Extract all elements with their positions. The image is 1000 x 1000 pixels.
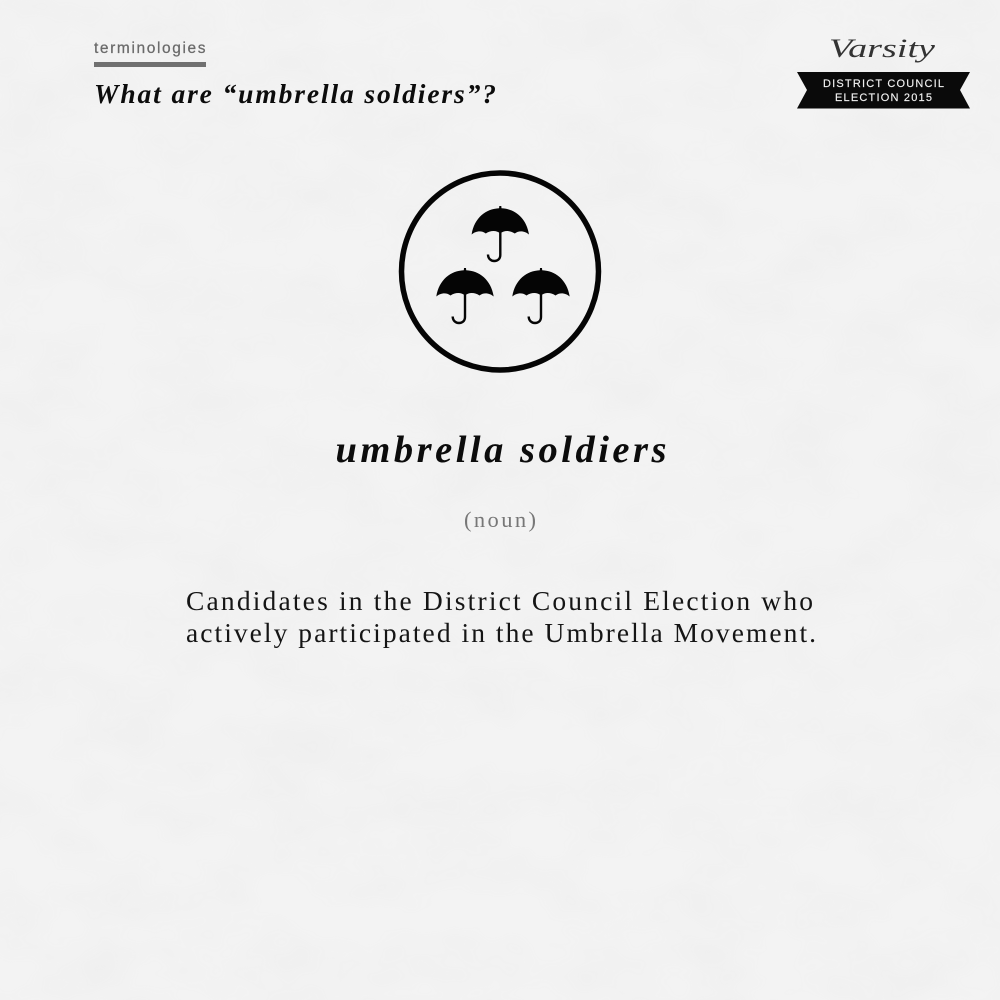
icon: lower left umbrella (436, 268, 494, 323)
icon: lower right umbrella (512, 268, 570, 323)
icon: top umbrella (472, 206, 529, 261)
section label underline bar (94, 62, 206, 67)
ribbon banner: District Council Election 2015: DISTRICT COUNCIL (823, 78, 944, 90)
heading: question: What are “umbrella soldiers”? (94, 78, 496, 109)
definition text: actively participated in the Umbrella Movement. (186, 617, 816, 648)
definition text (186, 585, 816, 648)
icon: three umbrellas in a circle (402, 173, 598, 370)
ribbon banner: District Council Election 2015: ELECTION 2015 (835, 92, 932, 104)
ribbon banner: District Council Election 2015 (797, 72, 970, 108)
logo: Varsity wordmark: Varsity (829, 34, 936, 63)
part of speech: (noun) (464, 507, 536, 532)
term title: umbrella soldiers (336, 429, 666, 471)
definition text: Candidates in the District Council Election who (186, 585, 813, 616)
section label: terminologies: terminologies (94, 40, 206, 57)
